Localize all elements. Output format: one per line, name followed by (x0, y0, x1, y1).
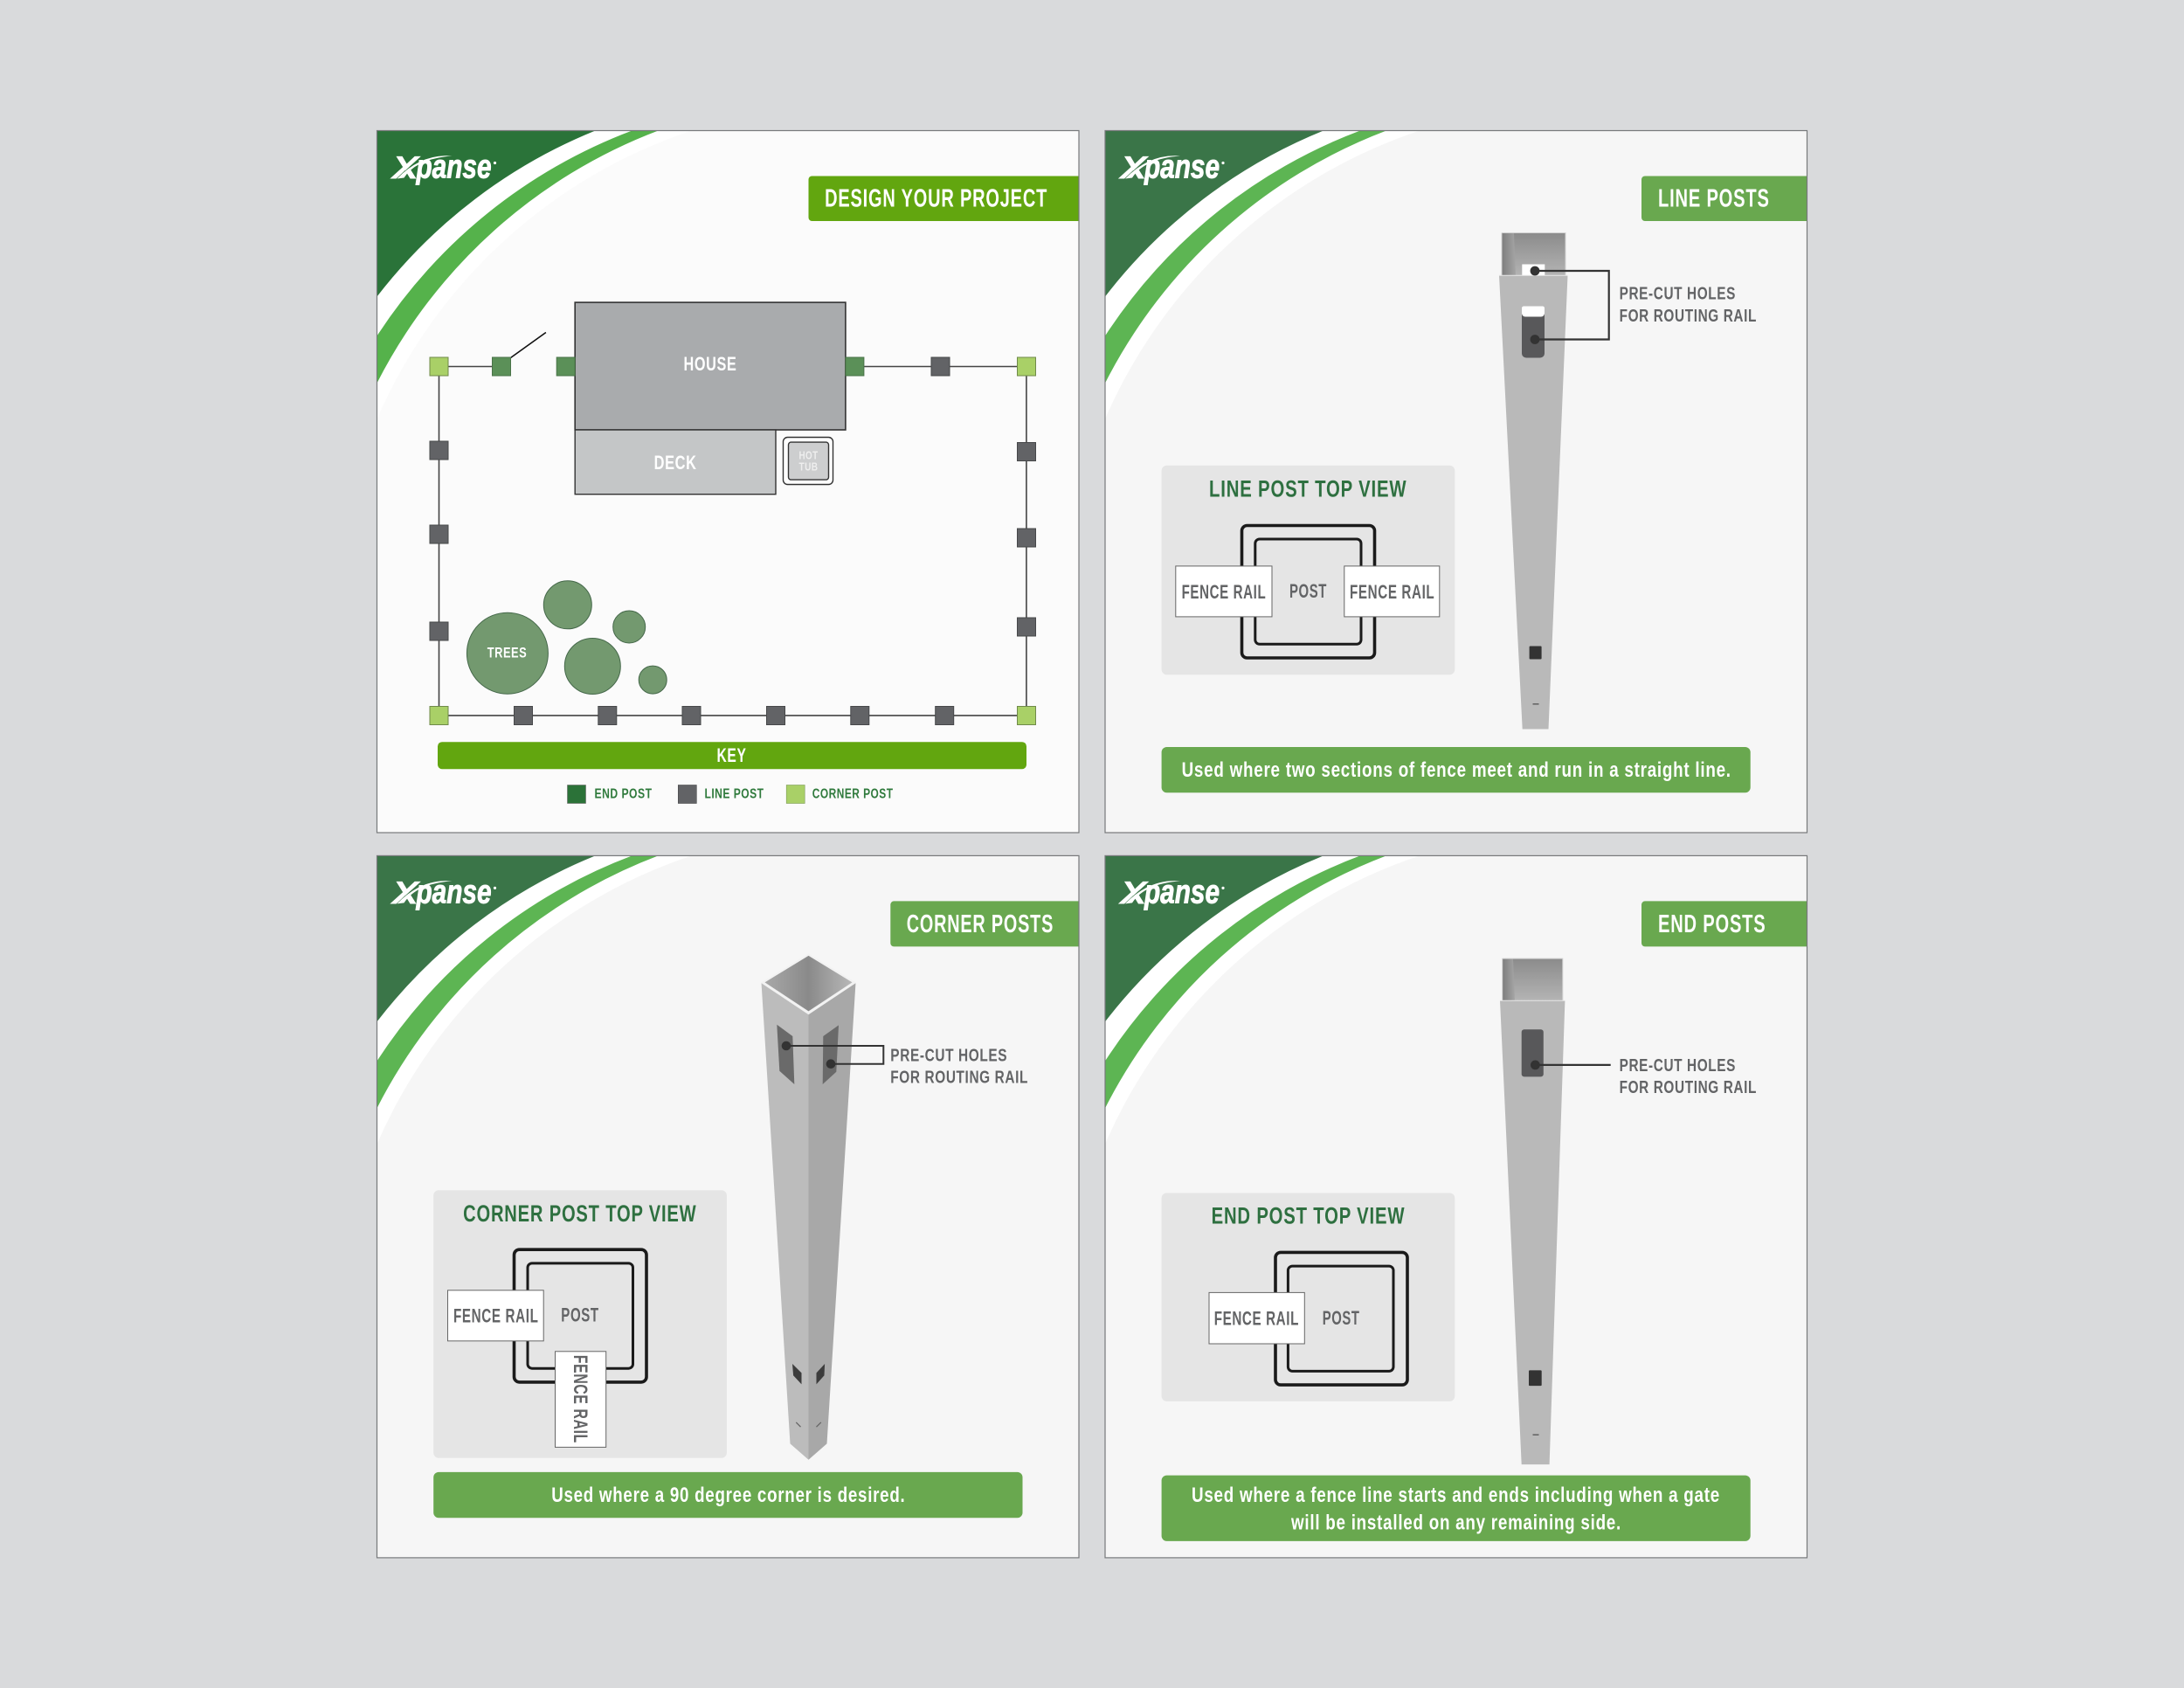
panel background (377, 131, 1079, 833)
post illustration (1499, 232, 1567, 729)
corner swoosh (1105, 131, 1420, 419)
logo: Xpanse: panse (416, 874, 491, 910)
leader lines (1531, 267, 1609, 343)
key bar (438, 742, 1026, 769)
corner swoosh (1105, 855, 1420, 1144)
end post top view: POST (1323, 1307, 1359, 1329)
legend: CORNER POST (812, 786, 893, 802)
title tab (1641, 176, 1807, 221)
panel: design your project (377, 131, 1080, 833)
logo: Xpanse (390, 874, 496, 910)
callout: pre-cut holes: FOR ROUTING RAIL (890, 1067, 1028, 1087)
title tab: LINE POSTS (1658, 185, 1770, 213)
logo: Xpanse (390, 149, 496, 185)
corner post top view: FENCE RAIL (570, 1355, 591, 1443)
title tab: DESIGN YOUR PROJECT (825, 185, 1047, 213)
end posts (493, 357, 864, 376)
logo: Xpanse: panse (1144, 149, 1220, 185)
legend: END POST (594, 786, 652, 802)
trees (467, 581, 667, 694)
deck (575, 430, 776, 495)
key bar: KEY (716, 744, 746, 766)
corner post top view: FENCE RAIL (453, 1304, 538, 1326)
hot tub: TUB (798, 460, 818, 474)
house: HOUSE (683, 353, 737, 375)
line post top view: POST (1289, 580, 1327, 602)
panel border (1105, 131, 1807, 833)
deck: DECK (654, 452, 697, 474)
corner swoosh (377, 131, 692, 419)
panel: end posts (1105, 855, 1807, 1558)
title tab: CORNER POSTS (907, 910, 1054, 938)
panel background (1105, 855, 1807, 1558)
title tab (890, 901, 1080, 946)
panel background (1105, 131, 1807, 833)
post illustration (1500, 958, 1565, 1464)
callout: pre-cut holes (1620, 283, 1757, 326)
callout: pre-cut holes: PRE-CUT HOLES (1620, 1055, 1736, 1076)
title tab (1641, 901, 1807, 946)
description bar (1162, 747, 1751, 792)
description bar (1162, 1476, 1751, 1541)
logo: Xpanse: X (1117, 875, 1150, 910)
hot tub: HOT (798, 449, 818, 461)
end post top view: END POST TOP VIEW (1212, 1202, 1405, 1228)
corner post top view: CORNER POST TOP VIEW (463, 1200, 696, 1227)
description bar: will be installed on any remaining side. (1290, 1511, 1621, 1534)
logo: Xpanse (1117, 149, 1225, 185)
logo: Xpanse (1117, 874, 1225, 910)
hot tub (783, 437, 833, 484)
legend: LINE POST (704, 786, 764, 802)
panel background (377, 855, 1079, 1558)
logo: Xpanse: X (390, 150, 421, 185)
legend (568, 785, 893, 804)
line post top view: LINE POST TOP VIEW (1209, 475, 1406, 502)
callout: pre-cut holes: FOR ROUTING RAIL (1620, 1077, 1757, 1097)
description bar: Used where a fence line starts and ends including when a gate (1192, 1484, 1720, 1507)
end post top view: FENCE RAIL (1214, 1308, 1299, 1330)
post illustration (762, 953, 856, 1460)
callout: pre-cut holes: PRE-CUT HOLES (1620, 283, 1736, 304)
line post top view (1162, 466, 1455, 675)
title tab (809, 176, 1080, 221)
logo: Xpanse: panse (1144, 874, 1220, 910)
callout: pre-cut holes (890, 1045, 1028, 1087)
logo: Xpanse: X (390, 875, 421, 910)
callout: pre-cut holes: PRE-CUT HOLES (890, 1045, 1007, 1065)
corner post top view (433, 1190, 727, 1458)
corner posts (430, 357, 1036, 725)
fence lines (439, 332, 1026, 716)
corner post top view: POST (561, 1304, 599, 1325)
panel: line posts (1105, 131, 1807, 833)
leader line (1531, 1062, 1611, 1069)
panel border (1105, 855, 1807, 1558)
logo: Xpanse: X (1117, 150, 1150, 185)
end post top view (1162, 1193, 1455, 1401)
panel: corner posts (377, 855, 1080, 1558)
description bar: Used where a 90 degree corner is desired. (551, 1484, 905, 1507)
title tab: END POSTS (1658, 910, 1766, 938)
line posts (430, 357, 1036, 725)
line post top view: FENCE RAIL (1182, 581, 1266, 603)
leader lines (783, 1042, 883, 1068)
line post top view: FENCE RAIL (1350, 581, 1434, 603)
corner swoosh (377, 855, 692, 1144)
description bar (433, 1472, 1022, 1518)
callout: pre-cut holes (1620, 1055, 1757, 1097)
panel border (377, 855, 1079, 1558)
house (575, 302, 846, 430)
panel border (377, 131, 1079, 833)
logo: Xpanse: panse (416, 149, 491, 185)
description bar: Used where two sections of fence meet and run in a straight line. (1182, 758, 1731, 782)
callout: pre-cut holes: FOR ROUTING RAIL (1620, 306, 1757, 326)
trees: TREES (487, 645, 527, 661)
